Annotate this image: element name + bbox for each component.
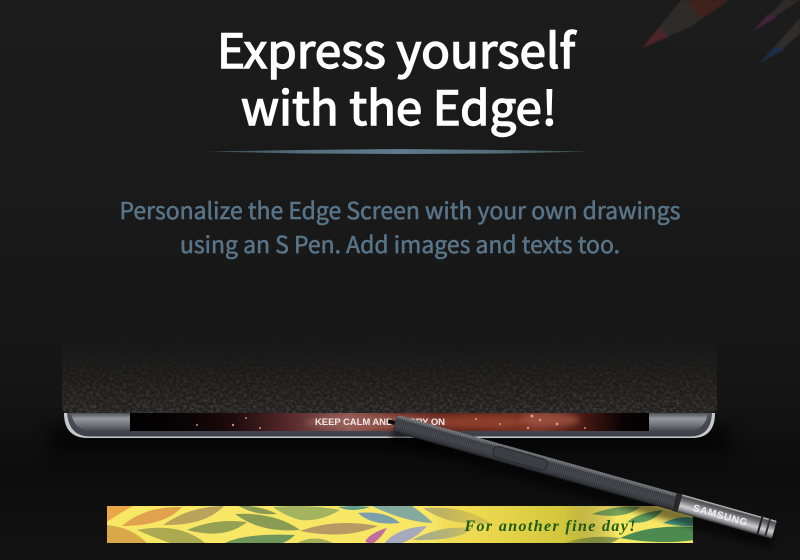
subtitle text: using an S Pen. Add images and texts too. <box>180 226 620 260</box>
ribbed pen barrel <box>393 415 676 510</box>
subtitle text <box>120 192 680 260</box>
SAMSUNG wordmark: SAMSUNG <box>692 503 749 529</box>
S Pen stylus <box>383 412 779 549</box>
title: Express yourself <box>217 13 577 82</box>
silver pen end <box>672 493 777 539</box>
phone body metal frame <box>64 413 715 438</box>
leather cover <box>62 356 717 413</box>
metal end left <box>71 413 130 431</box>
metal end right <box>648 413 708 431</box>
title: with the Edge! <box>241 70 557 139</box>
edge screen <box>130 413 649 431</box>
device shadow <box>50 425 730 455</box>
coloured pencils <box>642 0 800 63</box>
title divider <box>205 149 590 154</box>
device: phone with leather cover and edge screen <box>59 356 721 446</box>
banner message: For another fine day! <box>464 518 636 535</box>
title <box>217 13 577 139</box>
pen button <box>492 445 549 471</box>
pen shadow <box>390 429 775 549</box>
pen nib <box>388 419 397 425</box>
subtitle text: Personalize the Edge Screen with your own drawings <box>120 192 680 226</box>
edge banner with leaf pattern <box>105 505 695 545</box>
edge screen message: KEEP CALM AND CARRY ON <box>315 417 445 428</box>
